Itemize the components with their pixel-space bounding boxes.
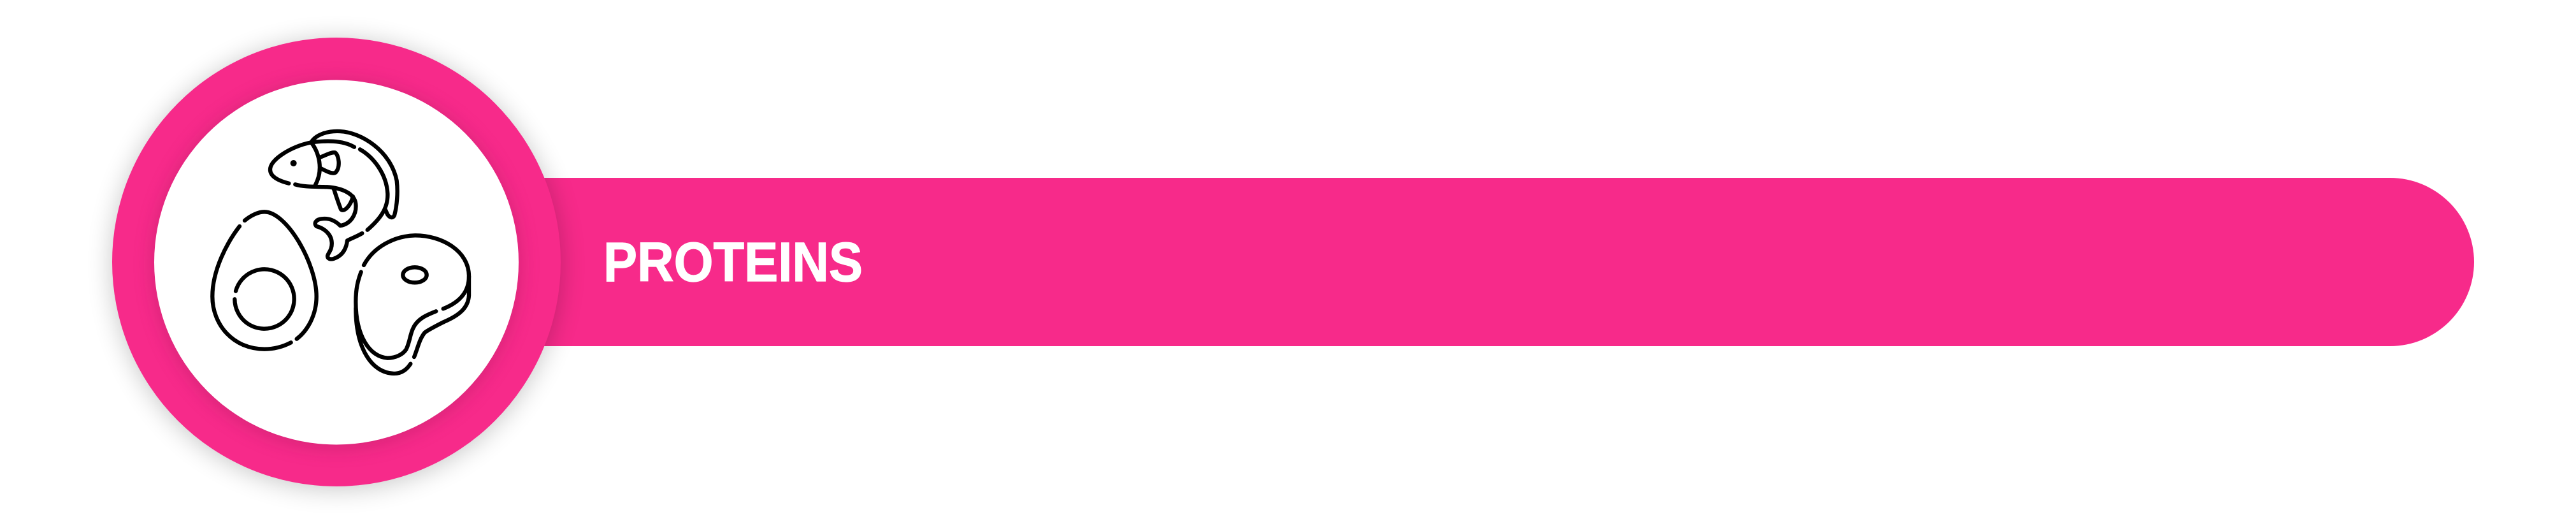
icon: fish	[270, 131, 398, 259]
icon: steak	[356, 235, 469, 374]
heading: proteins: PROTEINS	[603, 231, 863, 293]
badge: circular icon holder	[112, 38, 561, 489]
icon: boiled egg	[212, 212, 317, 349]
panel: heading bar	[446, 178, 2474, 346]
